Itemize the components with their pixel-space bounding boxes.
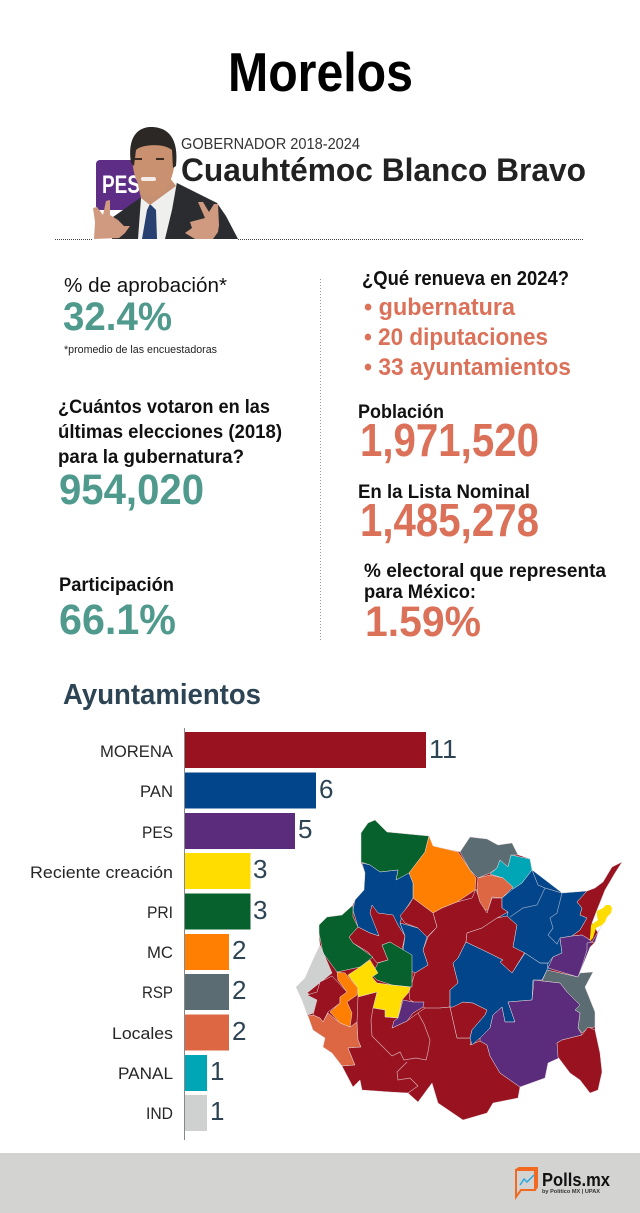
suit [112, 183, 238, 239]
stat: population: 1,971,520 [360, 414, 539, 466]
stat: votes 2018: 954,020 [59, 466, 204, 514]
stat: renewed in 2024: • 20 diputaciones [364, 324, 548, 351]
section heading: Ayuntamientos: Ayuntamientos [63, 679, 261, 711]
bar: IND: 1 [210, 1096, 224, 1126]
stat: approval: *promedio de las encuestadoras [64, 344, 217, 356]
bar: MC: 2 [232, 935, 246, 965]
bar: PES: 5 [298, 814, 312, 844]
bar: Locales: Locales [112, 1024, 173, 1043]
bar: PANAL: PANAL [118, 1064, 173, 1083]
bar: Reciente creación [30, 853, 267, 889]
stat: votes 2018: para la gubernatura? [58, 447, 244, 468]
bar: Locales: 2 [232, 1016, 246, 1046]
bar: IND [146, 1095, 224, 1131]
bar: PAN: PAN [140, 782, 173, 801]
hands [93, 200, 219, 239]
stat: renewed in 2024: • gubernatura [364, 294, 516, 321]
bar: MORENA: 11 [429, 734, 457, 764]
bar: PRI [147, 894, 267, 930]
bar: MORENA [100, 732, 457, 768]
icon: PES party logo: PES [102, 171, 140, 199]
bar: PES [142, 813, 312, 849]
governor portrait [93, 127, 238, 239]
stat: population: Población [358, 402, 444, 423]
stat: renewed in 2024: • 33 ayuntamientos [364, 354, 571, 381]
bar: PAN: 6 [319, 774, 333, 804]
stat: approval: % de aprobación* [64, 275, 227, 297]
stat: approval: 32.4% [63, 295, 172, 339]
bar: PANAL: 1 [210, 1056, 224, 1086]
bar: PES: PES [142, 823, 173, 842]
footer band [0, 1153, 640, 1213]
map of Morelos municipalities [296, 820, 622, 1120]
logo: Polls.mx: by Político MX | UPAX [542, 1189, 601, 1195]
bar: MC [147, 934, 246, 970]
title: Morelos [228, 41, 413, 103]
stat: electoral share: 1.59% [365, 598, 481, 646]
bar: PRI: 3 [253, 895, 267, 925]
icon: PES party logo [96, 160, 156, 210]
bar: Reciente creación: 3 [253, 854, 267, 884]
icon: orange speech box [516, 1168, 537, 1197]
stat: votes 2018: ¿Cuántos votaron en las [58, 397, 270, 418]
shirt [138, 182, 177, 239]
office label: GOBERNADOR 2018-2024 [181, 136, 360, 153]
stat: votes 2018 [58, 397, 282, 514]
stat: electoral share: para México: [364, 582, 476, 603]
stat: renewed in 2024: ¿Qué renueva en 2024? [362, 268, 569, 290]
logo: Polls.mx [516, 1168, 610, 1197]
stat: electoral share [364, 561, 606, 646]
bar: PRI: PRI [147, 903, 173, 922]
bar: MC: MC [147, 943, 173, 962]
governor name: Cuauhtémoc Blanco Bravo [181, 152, 586, 188]
bar: IND: IND [146, 1104, 173, 1123]
logo: Polls.mx: Polls.mx [542, 1170, 610, 1190]
bar: RSP: 2 [232, 975, 246, 1005]
stat: renewed in 2024 [362, 268, 571, 381]
neck and face [130, 127, 176, 205]
stat: approval [63, 275, 227, 356]
bar: MORENA: MORENA [100, 742, 174, 761]
stat: turnout: Participación [59, 575, 174, 596]
bar: Locales [112, 1014, 246, 1050]
bar chart [30, 728, 457, 1140]
stat: turnout [59, 575, 176, 644]
stat: nominal list: 1,485,278 [360, 494, 539, 546]
stat: electoral share: % electoral que representa [364, 561, 606, 582]
bar: RSP [142, 974, 246, 1010]
bar: PANAL [118, 1055, 224, 1091]
stat: votes 2018: últimas elecciones (2018) [58, 422, 282, 443]
stat: nominal list: En la Lista Nominal [358, 482, 530, 503]
bar: Reciente creación: Reciente creación [30, 863, 173, 882]
bar: RSP: RSP [142, 983, 173, 1002]
stat: turnout: 66.1% [59, 596, 176, 644]
bar: PAN [140, 772, 333, 808]
tie [142, 204, 157, 239]
